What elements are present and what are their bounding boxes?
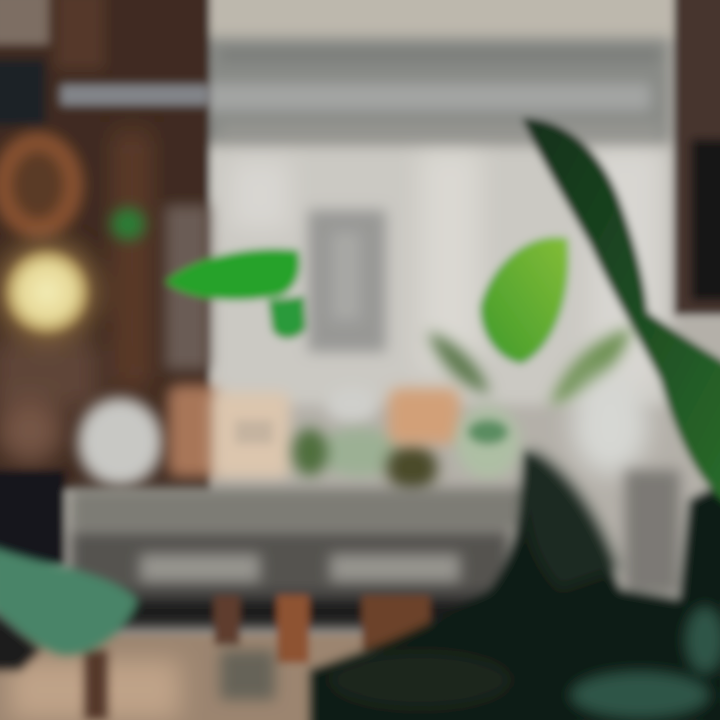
grey wall strip behind foliage xyxy=(625,470,680,595)
dark foreground foliage xyxy=(310,450,720,720)
lime leaf xyxy=(480,237,569,364)
wreath xyxy=(2,140,74,229)
icon: glowing lamp xyxy=(0,240,99,344)
thin pale leaves xyxy=(428,328,632,405)
brick wall column xyxy=(0,0,210,490)
large dark green leaf at right xyxy=(522,118,720,505)
small green leaf on brick xyxy=(111,208,145,240)
dark lower left corner xyxy=(0,608,40,670)
shelf with lower white objects xyxy=(70,488,540,629)
right dark post xyxy=(674,0,720,315)
white round pots at right xyxy=(572,375,648,475)
dark object at left xyxy=(0,470,65,565)
teal foreground leaf xyxy=(0,545,138,656)
floor and table legs xyxy=(0,595,430,720)
window blind band xyxy=(60,38,670,143)
grey square picture xyxy=(308,210,386,352)
row of pots on shelf xyxy=(0,385,520,492)
bright green hanging leaf xyxy=(165,249,306,339)
